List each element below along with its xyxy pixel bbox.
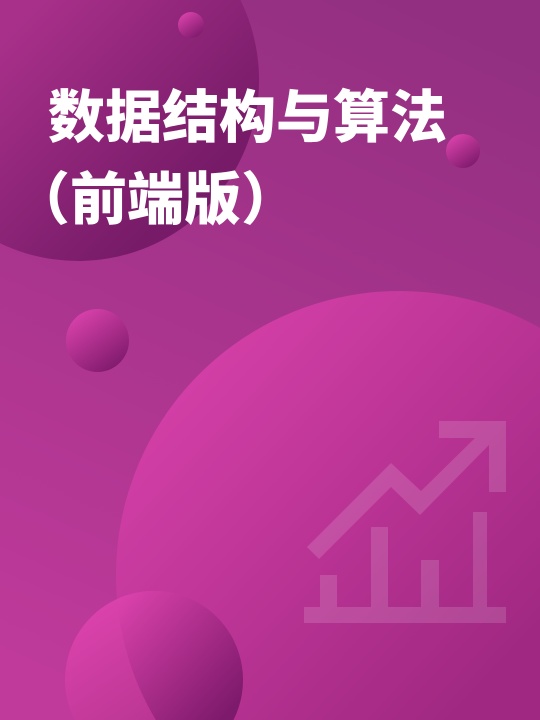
icon: rising chart — [304, 421, 506, 623]
ball left — [66, 309, 129, 372]
title line 1: 数据结构与算法 — [48, 86, 447, 150]
small ball top — [178, 12, 204, 38]
large circle — [116, 291, 540, 720]
dark circle top left — [0, 0, 259, 261]
ball bottom — [65, 591, 243, 720]
title line 2: （前端版） — [13, 168, 298, 232]
title — [13, 86, 447, 232]
small ball right — [446, 134, 480, 168]
